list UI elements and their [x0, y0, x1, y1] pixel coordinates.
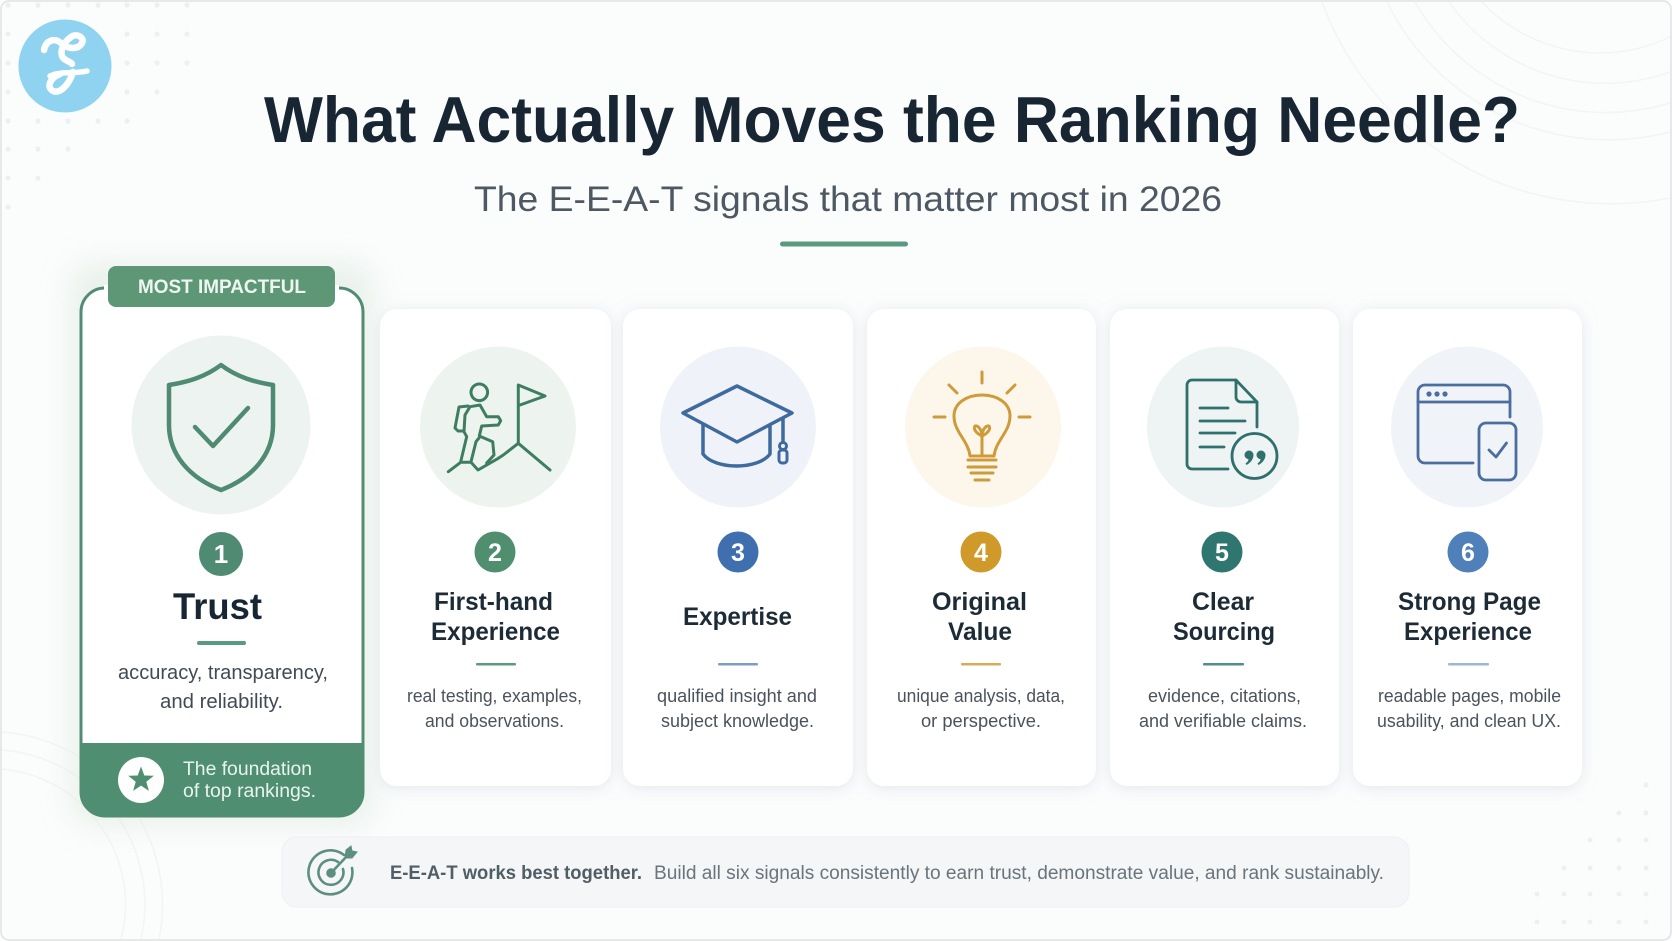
number badge 6 [1448, 532, 1488, 572]
card description: trust: and reliability. [160, 691, 283, 713]
icon: graduation cap [660, 346, 816, 508]
panel: first-hand experience card [380, 309, 611, 786]
card description: expertise: qualified insight and [657, 686, 817, 706]
card description: strong page experience: usability, and clean UX. [1377, 711, 1561, 731]
card heading: original value: Value [948, 618, 1012, 646]
card heading: strong page experience: Strong Page [1398, 588, 1541, 616]
number badge 6: 6 [1461, 539, 1475, 567]
title underline [780, 242, 908, 246]
card description: original value: unique analysis, data, [897, 686, 1065, 706]
card heading: original value: Original [932, 588, 1027, 616]
panel: expertise card [623, 309, 853, 786]
card heading: first-hand experience: Experience [431, 618, 560, 646]
panel: trust card [70, 262, 374, 826]
card heading: expertise: Expertise [683, 603, 792, 631]
card heading: strong page experience: Experience [1404, 618, 1532, 646]
card description: expertise: subject knowledge. [661, 711, 814, 731]
number badge 2: 2 [488, 539, 502, 567]
card description: first-hand experience: and observations. [425, 711, 564, 731]
card description: strong page experience: readable pages, mobile [1378, 686, 1561, 706]
foundation band: The foundation [183, 759, 312, 780]
logo [18, 20, 112, 112]
card heading: trust: Trust [173, 586, 262, 627]
foundation band: of top rankings. [183, 781, 316, 802]
icon: target with arrow [308, 846, 357, 894]
subtitle: The E-E-A-T signals that matter most in 2026 [474, 180, 1222, 219]
card description: first-hand experience: real testing, examples, [407, 686, 582, 706]
panel: clear sourcing card [1110, 309, 1339, 786]
number badge 3: 3 [731, 539, 745, 567]
panel: strong page experience card [1353, 309, 1582, 786]
number badge 3 [718, 532, 758, 572]
card heading: first-hand experience: First-hand [434, 588, 553, 616]
icon: shield check [132, 336, 310, 514]
card heading: clear sourcing: Sourcing [1173, 618, 1275, 646]
badge: most impactful: MOST IMPACTFUL [138, 277, 306, 298]
card description: clear sourcing: and verifiable claims. [1139, 711, 1307, 731]
icon: light bulb [905, 346, 1061, 508]
number badge 2 [474, 532, 516, 572]
callout text: E-E-A-T works best together. [390, 863, 642, 884]
icon: browser and phone [1391, 346, 1543, 508]
number badge 1 [199, 532, 243, 576]
card description: clear sourcing: evidence, citations, [1148, 686, 1301, 706]
number badge 5 [1202, 532, 1242, 572]
title: What Actually Moves the Ranking Needle? [264, 83, 1520, 156]
number badge 4: 4 [974, 539, 988, 567]
foundation band [81, 743, 363, 816]
card description: original value: or perspective. [921, 711, 1041, 731]
card description: trust: accuracy, transparency, [118, 662, 328, 684]
number badge 1: 1 [214, 539, 228, 569]
number badge 4 [960, 532, 1002, 572]
number badge 5: 5 [1215, 539, 1229, 567]
callout: e-e-a-t works best together [282, 837, 1409, 907]
callout text: Build all six signals consistently to earn trust, demonstrate value, and rank sustainably. [654, 863, 1384, 884]
card heading: clear sourcing: Clear [1192, 588, 1254, 616]
badge: most impactful [104, 266, 339, 307]
panel: original value card [867, 309, 1096, 786]
icon: hiker and flag [420, 346, 576, 508]
icon: document with quote [1147, 346, 1299, 508]
